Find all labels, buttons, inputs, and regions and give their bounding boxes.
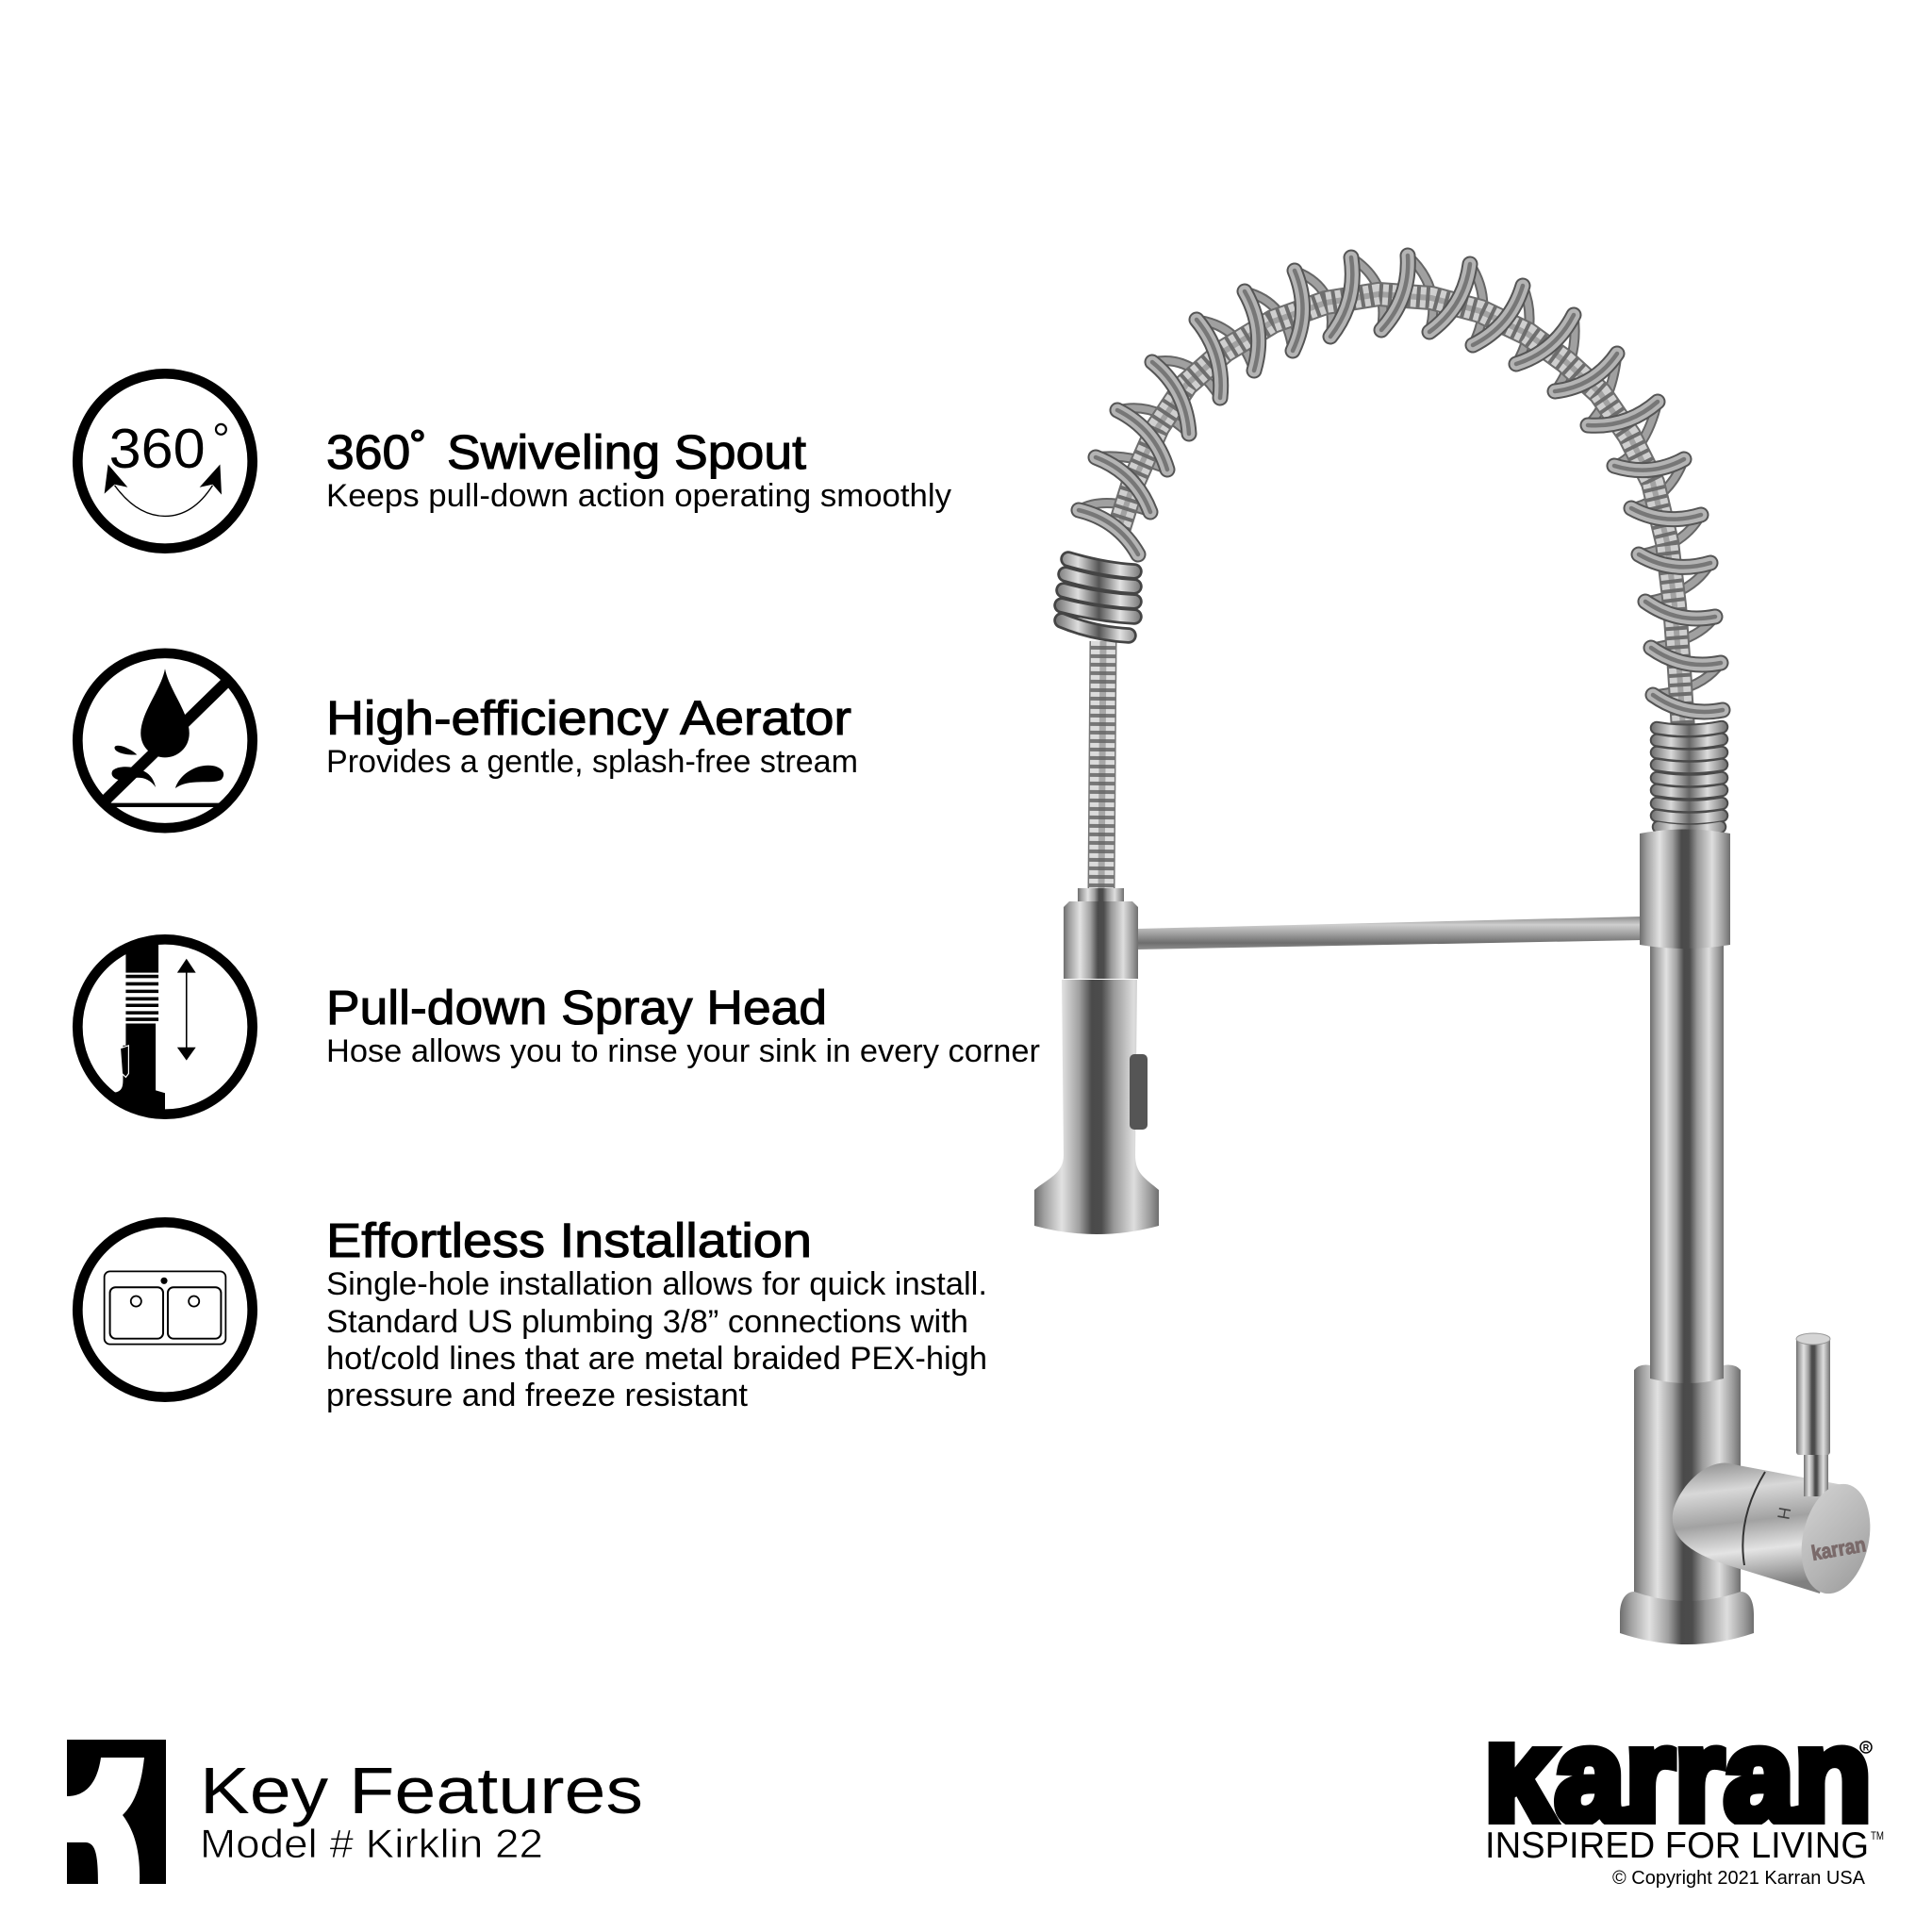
brand logo: karran: R — [1863, 1742, 1870, 1752]
text: swiveling spout description: Keeps pull-down action operating smoothly — [326, 478, 951, 514]
tagline: INSPIRED FOR LIVING — [1485, 1825, 1869, 1866]
coil back strands — [1079, 256, 1721, 695]
hot marker: H — [1774, 1506, 1794, 1521]
heading: aerator: High-efficiency Aerator — [326, 691, 851, 745]
lever handle — [1796, 1333, 1830, 1455]
heading: swiveling spout: 360˚ — [326, 425, 427, 479]
subtitle: model number: Model # Kirklin 22 — [200, 1822, 543, 1867]
horizontal bar — [1137, 916, 1643, 949]
main column — [1650, 943, 1724, 1395]
tagline: TM — [1871, 1829, 1884, 1842]
logo mark: Karran K — [67, 1740, 166, 1884]
right coil stack — [1657, 727, 1722, 830]
spray head upper — [1064, 901, 1138, 979]
heading: swiveling spout: Swiveling Spout — [447, 425, 806, 479]
icon: pull-down spray head — [77, 937, 253, 1115]
infographic canvas — [67, 247, 1884, 1888]
text: installation description: pressure and freeze resistant — [326, 1378, 749, 1413]
spray button — [1130, 1054, 1148, 1130]
spray head lower — [1034, 980, 1159, 1234]
faucet base — [1634, 1365, 1741, 1603]
text: installation description: Single-hole installation allows for quick install. — [326, 1266, 987, 1302]
text: aerator description: Provides a gentle, splash-free stream — [326, 744, 858, 780]
heading: spray head: Pull-down Spray Head — [326, 981, 827, 1034]
text: installation description — [326, 1266, 987, 1413]
product photo: spring faucet — [1034, 256, 1880, 1644]
upper collar — [1640, 830, 1730, 949]
left coil stack — [1062, 559, 1134, 636]
text: spray head description: Hose allows you to rinse your sink in every corner — [326, 1033, 1040, 1069]
icon: double sink installation — [77, 1222, 253, 1397]
copyright: © Copyright 2021 Karran USA — [1612, 1868, 1866, 1889]
title: key features: Key Features — [200, 1754, 643, 1827]
coil front strands — [1079, 256, 1723, 712]
lever stem — [1804, 1453, 1828, 1496]
corrugated hose — [1101, 294, 1684, 891]
text: installation description: hot/cold lines that are metal braided PEX-high — [326, 1341, 987, 1377]
icon: 360 degree swivel — [77, 373, 253, 549]
spray head neck — [1078, 888, 1124, 903]
faucet brand mark: karran — [1809, 1532, 1868, 1565]
icon: 360 degree swivel: 360 — [109, 417, 206, 480]
text: installation description: Standard US plumbing 3/8” connections with — [326, 1304, 968, 1340]
brand logo: karran — [1488, 1741, 1873, 1825]
icon: no splash aerator — [77, 653, 253, 828]
lever body — [1673, 1462, 1843, 1593]
brand logo: karran: karran — [1484, 1701, 1872, 1851]
lever disc — [1792, 1478, 1880, 1600]
heading: installation: Effortless Installation — [326, 1214, 812, 1267]
faucet foot — [1620, 1592, 1754, 1644]
